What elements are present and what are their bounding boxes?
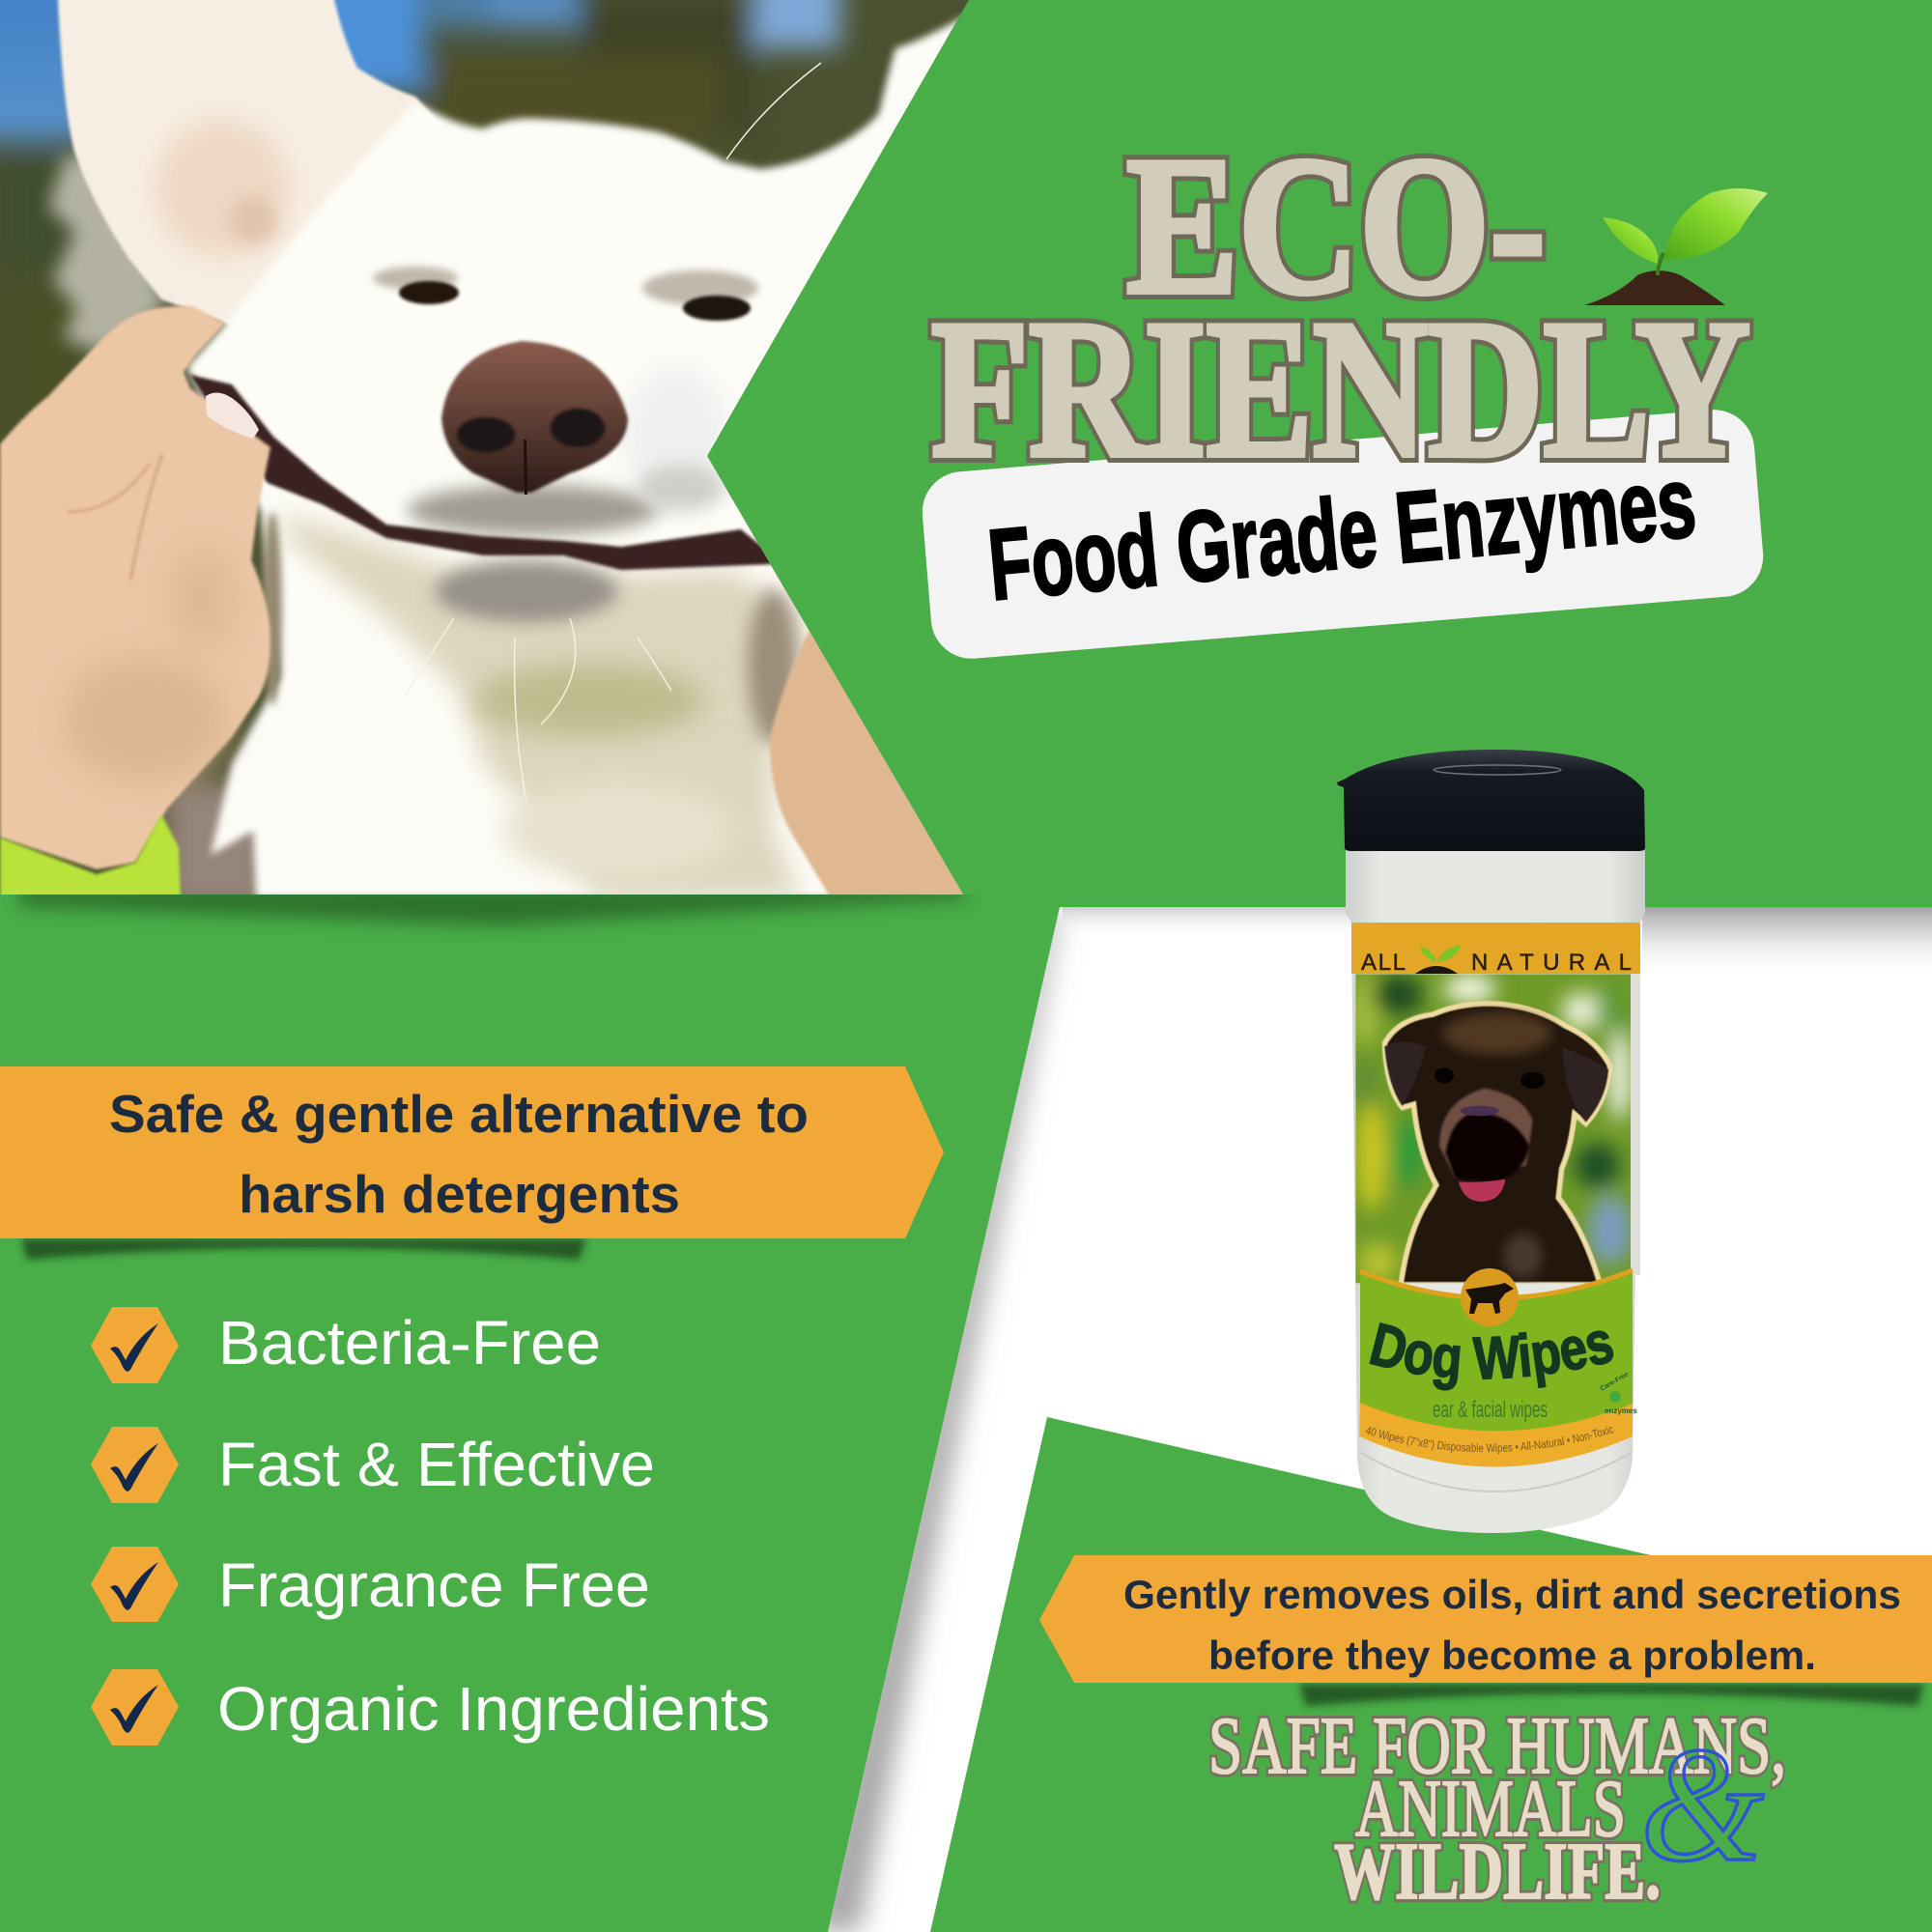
top orange band xyxy=(1351,923,1640,974)
orange banner: safe and gentle: harsh detergents xyxy=(239,1164,680,1224)
orange banner: safe and gentle xyxy=(0,1066,944,1260)
heading: safe for humans, animals and wildlife: ANIMALS xyxy=(1355,1764,1626,1854)
left hand xyxy=(0,306,270,869)
heading: safe for humans, animals and wildlife xyxy=(1208,1701,1786,1917)
orange banner: safe and gentle: Safe & gentle alternative to xyxy=(109,1084,809,1144)
ALL NATURAL label text: NATURAL xyxy=(1471,950,1632,976)
Dog Wipes product name: Dog Wipes xyxy=(1369,1322,1613,1391)
tilted white label: food grade enzymes xyxy=(920,407,1766,662)
item: fragrance free: Fragrance Free xyxy=(218,1550,650,1620)
dog eyes xyxy=(373,267,758,321)
care free enzymes mark xyxy=(1600,1371,1637,1415)
care free enzymes mark: Care-Free xyxy=(1600,1371,1630,1393)
shadow under photo xyxy=(19,887,966,925)
checklist xyxy=(91,1307,770,1746)
heading: safe for humans, animals and wildlife: WILDLIFE. xyxy=(1334,1827,1661,1917)
item: organic ingredients: Organic Ingredients xyxy=(217,1674,770,1744)
grey fur behind ear xyxy=(48,155,164,353)
title: eco-friendly: FRIENDLY xyxy=(931,280,1750,498)
orange banner: gently removes xyxy=(1039,1555,1932,1706)
product: dog wipes canister xyxy=(1337,750,1645,1533)
dog nose xyxy=(441,341,628,495)
orange banner: gently removes: before they become a problem. xyxy=(1208,1633,1816,1678)
canister body xyxy=(1346,848,1645,1533)
item: fast and effective: Fast & Effective xyxy=(218,1430,655,1499)
photo background: sky and trees xyxy=(0,0,976,908)
heading: safe for humans, animals and wildlife: WILDLIFE. xyxy=(1334,1827,1661,1917)
green band xyxy=(1360,1272,1633,1431)
item: bacteria-free xyxy=(91,1307,601,1383)
title: eco-friendly: ECO- xyxy=(1126,117,1546,335)
canister base ridge xyxy=(1359,1452,1633,1492)
side info strip xyxy=(1631,974,1640,1275)
title: eco-friendly xyxy=(931,117,1750,498)
lower orange band xyxy=(1359,1391,1633,1466)
title: eco-friendly: FRIENDLY xyxy=(931,280,1750,498)
orange banner: gently removes: Gently removes oils, dirt and secretions xyxy=(1123,1572,1901,1617)
care free enzymes mark: enzymes xyxy=(1605,1406,1637,1415)
heading: safe for humans, animals and wildlife: & xyxy=(1640,1714,1764,1895)
dog left ear xyxy=(56,0,435,326)
label photo of puppy xyxy=(1352,974,1633,1285)
product fine print: 40 Wipes (7"x8") Disposable Wipes • All-Natural • Non-Toxic xyxy=(1366,1426,1613,1455)
icon: sprout in soil xyxy=(1584,188,1768,305)
green band gold rule xyxy=(1360,1270,1633,1298)
title: eco-friendly: ECO- xyxy=(1126,117,1546,335)
round dog badge xyxy=(1461,1268,1519,1326)
item: bacteria-free: Bacteria-Free xyxy=(218,1308,601,1378)
item: fast and effective xyxy=(91,1427,655,1503)
right hand xyxy=(769,630,963,895)
white panel xyxy=(811,907,1932,1932)
muzzle grey fur xyxy=(408,367,729,622)
photo: smiling white dog with hands xyxy=(0,0,976,908)
heading: safe for humans, animals and wildlife: ANIMALS xyxy=(1355,1764,1626,1854)
puppy figure xyxy=(1384,1004,1610,1285)
ALL NATURAL label text: ALL xyxy=(1361,950,1406,976)
lime sleeve xyxy=(0,814,181,898)
whiskers xyxy=(406,63,821,802)
product subtitle: ear & facial wipes xyxy=(1433,1397,1548,1423)
dog mouth xyxy=(190,375,773,570)
canister cap xyxy=(1337,750,1645,851)
dog head and body xyxy=(186,10,976,898)
neck and chest shading xyxy=(263,512,802,898)
ALL NATURAL label text xyxy=(1361,945,1632,976)
